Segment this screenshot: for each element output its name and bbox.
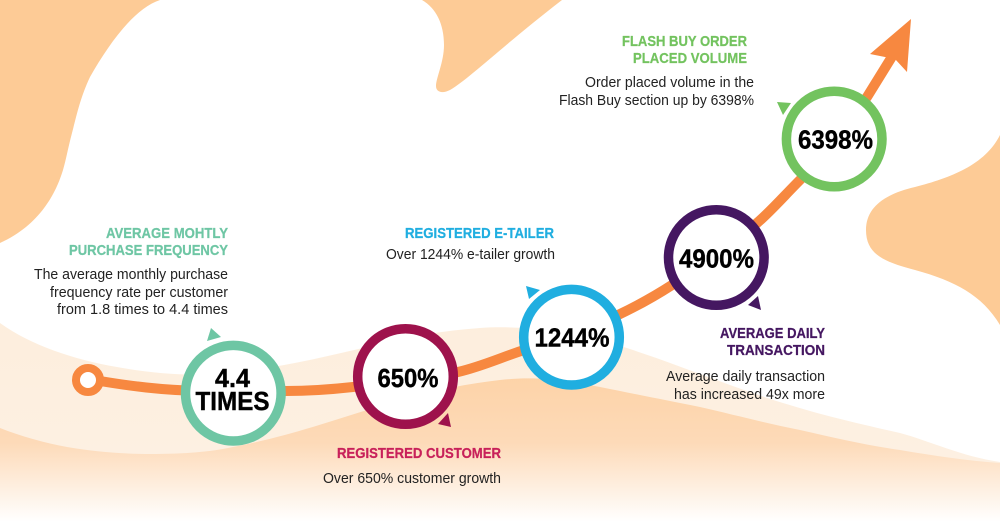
arrow head — [870, 19, 911, 72]
text: average monthly purchase frequency: The average monthly purchase — [34, 267, 228, 283]
node: 4900% — [668, 210, 764, 310]
blob: top centre — [422, 0, 562, 92]
wave: darker background — [0, 378, 1000, 530]
text: flash buy order placed volume: PLACED VOLUME — [633, 51, 747, 67]
node: 6398%: 6398% — [798, 124, 873, 154]
node: 1244%: 1244% — [534, 322, 610, 352]
node: 4900%: 4900% — [679, 244, 754, 274]
text: average monthly purchase frequency: AVERAGE MOHTLY — [106, 226, 228, 242]
blob: right — [866, 135, 1000, 325]
node: 6398% — [777, 91, 882, 187]
node: 1244% — [524, 286, 619, 385]
text: average daily transaction: has increased 49x more — [674, 387, 825, 403]
text: registered customer: REGISTERED CUSTOMER — [337, 446, 501, 462]
growth arrow line — [100, 19, 911, 391]
start marker — [76, 368, 100, 392]
blob: top left — [0, 0, 160, 243]
text: flash buy order placed volume: Flash Buy section up by 6398% — [559, 93, 754, 109]
text: flash buy order placed volume: Order placed volume in the — [585, 75, 754, 91]
node: 4.4 times — [186, 328, 281, 441]
text: registered e-tailer: Over 1244% e-tailer growth — [386, 247, 555, 263]
text: average daily transaction: Average daily transaction — [666, 369, 825, 385]
node: 4.4 times: TIMES — [196, 386, 270, 416]
text: flash buy order placed volume — [559, 34, 754, 109]
text: flash buy order placed volume: FLASH BUY ORDER — [622, 34, 747, 50]
text: average daily transaction: AVERAGE DAILY — [720, 326, 825, 342]
text: average daily transaction: TRANSACTION — [727, 343, 825, 359]
node: 4.4 times: 4.4 — [215, 363, 251, 393]
text: registered customer: Over 650% customer growth — [323, 471, 501, 487]
text: registered e-tailer — [386, 226, 555, 263]
text: registered e-tailer: REGISTERED E-TAILER — [405, 226, 554, 242]
text: average monthly purchase frequency: frequency rate per customer — [50, 285, 228, 301]
node: 650% — [358, 329, 453, 427]
text: average monthly purchase frequency — [34, 226, 228, 318]
text: registered customer — [323, 446, 501, 487]
wave: light background — [0, 323, 1000, 530]
text: average daily transaction — [666, 326, 825, 403]
text: average monthly purchase frequency: PURCHASE FREQUENCY — [69, 243, 228, 259]
text: average monthly purchase frequency: from 1.8 times to 4.4 times — [57, 302, 228, 318]
node: 650%: 650% — [378, 363, 438, 393]
